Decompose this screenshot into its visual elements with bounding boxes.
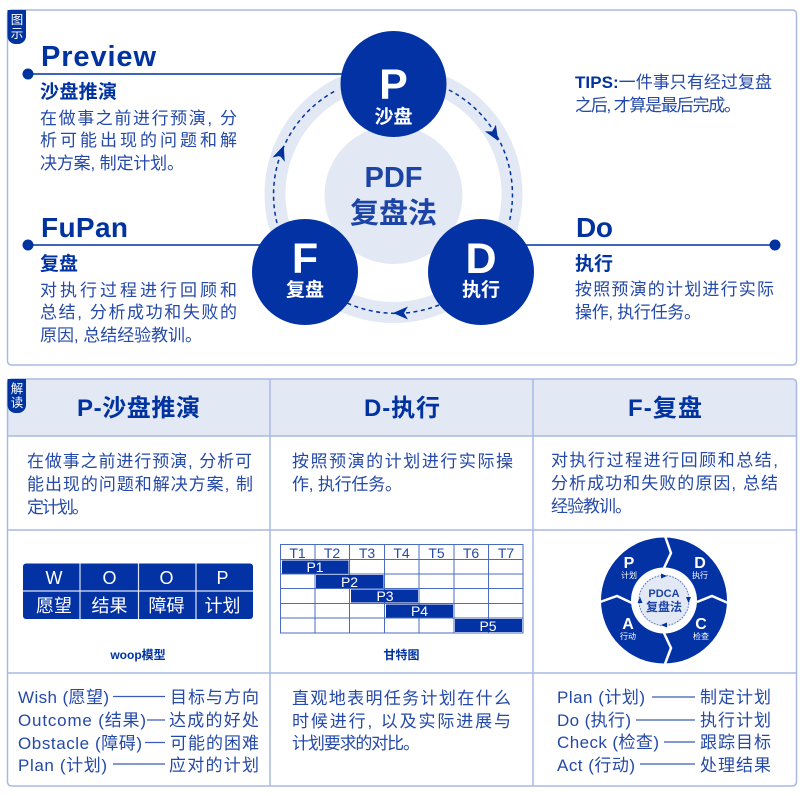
node P: 沙盘 <box>374 105 413 128</box>
text: P description: 定计划。 <box>27 498 89 517</box>
list: pdca explanation: 制定计划 <box>700 688 771 707</box>
block: preview: 在做事之前进行预演, 分 <box>40 109 237 128</box>
node D: D <box>465 235 497 283</box>
node P <box>340 31 446 137</box>
list: pdca explanation: Do (执行) <box>557 711 631 730</box>
block: do: 执行 <box>575 253 613 275</box>
center circle <box>324 126 462 264</box>
block: preview: 决方案, 制定计划。 <box>40 154 184 173</box>
gantt chart: T1 <box>289 545 306 561</box>
dashed arrows <box>274 90 512 313</box>
list: pdca explanation: 跟踪目标 <box>700 733 771 752</box>
list: pdca explanation: Act (行动) <box>557 756 635 775</box>
cycle diagram <box>252 31 534 325</box>
gantt chart: P1 <box>306 559 324 575</box>
list: woop explanation: Outcome (结果) <box>18 711 146 730</box>
tips: 之后, 才算是最后完成。 <box>575 96 741 115</box>
pdca wheel: D <box>694 555 706 572</box>
text: gantt explanation <box>292 689 511 753</box>
text: gantt explanation: 计划要求的对比。 <box>292 734 420 753</box>
block: fupan: 原因, 总结经验教训。 <box>40 326 202 345</box>
woop table: 愿望 <box>36 596 72 616</box>
block: fupan: 对执行过程进行回顾和 <box>40 281 237 300</box>
panel: interpretation table <box>8 379 796 786</box>
woop table <box>23 564 253 619</box>
gantt chart: P2 <box>341 574 358 590</box>
gantt chart: T3 <box>359 545 375 561</box>
gantt chart: P3 <box>376 588 394 604</box>
tag: diagram label: 图 <box>11 13 23 27</box>
pdca wheel: 检查 <box>693 631 709 641</box>
node F <box>252 219 358 325</box>
pdca wheel: 计划 <box>621 570 637 580</box>
gantt chart <box>280 544 523 634</box>
gantt chart: T4 <box>393 545 410 561</box>
list: pdca explanation: 执行计划 <box>700 711 771 730</box>
list: woop explanation: 应对的计划 <box>169 756 259 775</box>
tag: interpretation label <box>8 379 26 413</box>
node F: F <box>292 235 318 283</box>
tips: TIPS:一件事只有经过复盘 <box>575 73 772 92</box>
woop table: 障碍 <box>148 596 184 616</box>
node D: 执行 <box>462 279 500 301</box>
list: woop explanation: 达成的好处 <box>169 711 259 730</box>
block: preview: 析可能出现的问题和解 <box>40 131 237 150</box>
text: P description <box>27 452 253 517</box>
block: preview: 沙盘推演 <box>40 80 117 103</box>
block: fupan <box>22 212 262 345</box>
block: preview <box>22 41 345 173</box>
block: do: Do <box>576 212 613 243</box>
text: P description: 能出现的问题和解决方案, 制 <box>27 475 253 494</box>
text: D description: 作, 执行任务。 <box>292 475 402 494</box>
list: woop explanation: Wish (愿望) <box>18 688 109 707</box>
column headings: D-执行 <box>364 395 440 422</box>
text: gantt explanation: 时候进行, 以及实际进展与 <box>292 712 511 731</box>
list: woop explanation: Plan (计划) <box>18 756 107 775</box>
gantt chart: T7 <box>498 545 514 561</box>
woop table: O <box>102 568 117 588</box>
tag: diagram label: 示 <box>11 27 23 41</box>
gantt caption: 甘特图 <box>383 647 420 662</box>
gantt chart: T2 <box>324 545 340 561</box>
pdca wheel: P <box>624 555 635 572</box>
block: do: 按照预演的计划进行实际 <box>575 280 774 299</box>
column headings: P-沙盘推演 <box>77 395 200 422</box>
gantt chart: T5 <box>428 545 445 561</box>
list: woop explanation <box>18 688 259 775</box>
text: F description: 分析成功和失败的原因, 总结 <box>551 474 778 493</box>
woop table: 计划 <box>204 596 240 616</box>
woop table: W <box>46 568 62 588</box>
block: do <box>525 212 780 322</box>
text: F description: 经验教训。 <box>551 497 632 516</box>
block: fupan: FuPan <box>41 212 128 243</box>
list: woop explanation: 可能的困难 <box>170 734 259 753</box>
woop table: O <box>159 568 174 588</box>
text: F description: 对执行过程进行回顾和总结, <box>551 451 778 470</box>
block: do: 操作, 执行任务。 <box>575 303 701 322</box>
node P: P <box>379 61 408 109</box>
pdca wheel <box>600 536 728 664</box>
node D <box>428 219 534 325</box>
tag: interpretation label: 读 <box>11 396 23 410</box>
text: D description <box>292 452 513 494</box>
center circle: 复盘法 <box>350 197 437 230</box>
column headings: F-复盘 <box>628 395 702 422</box>
text: F description <box>551 451 778 516</box>
list: pdca explanation: 处理结果 <box>700 756 771 775</box>
column headings <box>77 395 702 422</box>
woop table: 结果 <box>92 596 128 616</box>
text: gantt explanation: 直观地表明任务计划在什么 <box>292 689 511 708</box>
gantt chart: P4 <box>411 603 428 619</box>
woop caption: woop模型 <box>109 647 166 662</box>
block: fupan: 复盘 <box>40 252 78 275</box>
text: D description: 按照预演的计划进行实际操 <box>292 452 513 471</box>
gantt chart: P5 <box>479 618 497 634</box>
pdca wheel: PDCA <box>648 588 680 600</box>
list: pdca explanation <box>557 688 771 775</box>
pdca wheel: A <box>622 616 634 633</box>
woop table: P <box>216 568 229 588</box>
pdca wheel: C <box>695 616 707 633</box>
pdca wheel: 行动 <box>620 631 636 641</box>
list: woop explanation: Obstacle (障碍) <box>18 734 142 753</box>
tag: diagram label <box>8 10 26 44</box>
center circle: PDF <box>364 162 422 194</box>
pdca wheel: 执行 <box>692 570 708 580</box>
tips <box>575 73 772 115</box>
text: P description: 在做事之前进行预演, 分析可 <box>27 452 252 471</box>
list: woop explanation: 目标与方向 <box>170 688 259 707</box>
list: pdca explanation: Plan (计划) <box>557 688 645 707</box>
block: preview: Preview <box>41 41 156 73</box>
list: pdca explanation: Check (检查) <box>557 733 659 752</box>
block: fupan: 总结, 分析成功和失败的 <box>40 303 237 322</box>
gantt chart: T6 <box>463 545 479 561</box>
pdca wheel: 复盘法 <box>646 599 682 614</box>
tag: interpretation label: 解 <box>11 382 23 396</box>
panel: diagram <box>8 10 796 365</box>
node F: 复盘 <box>286 278 324 301</box>
